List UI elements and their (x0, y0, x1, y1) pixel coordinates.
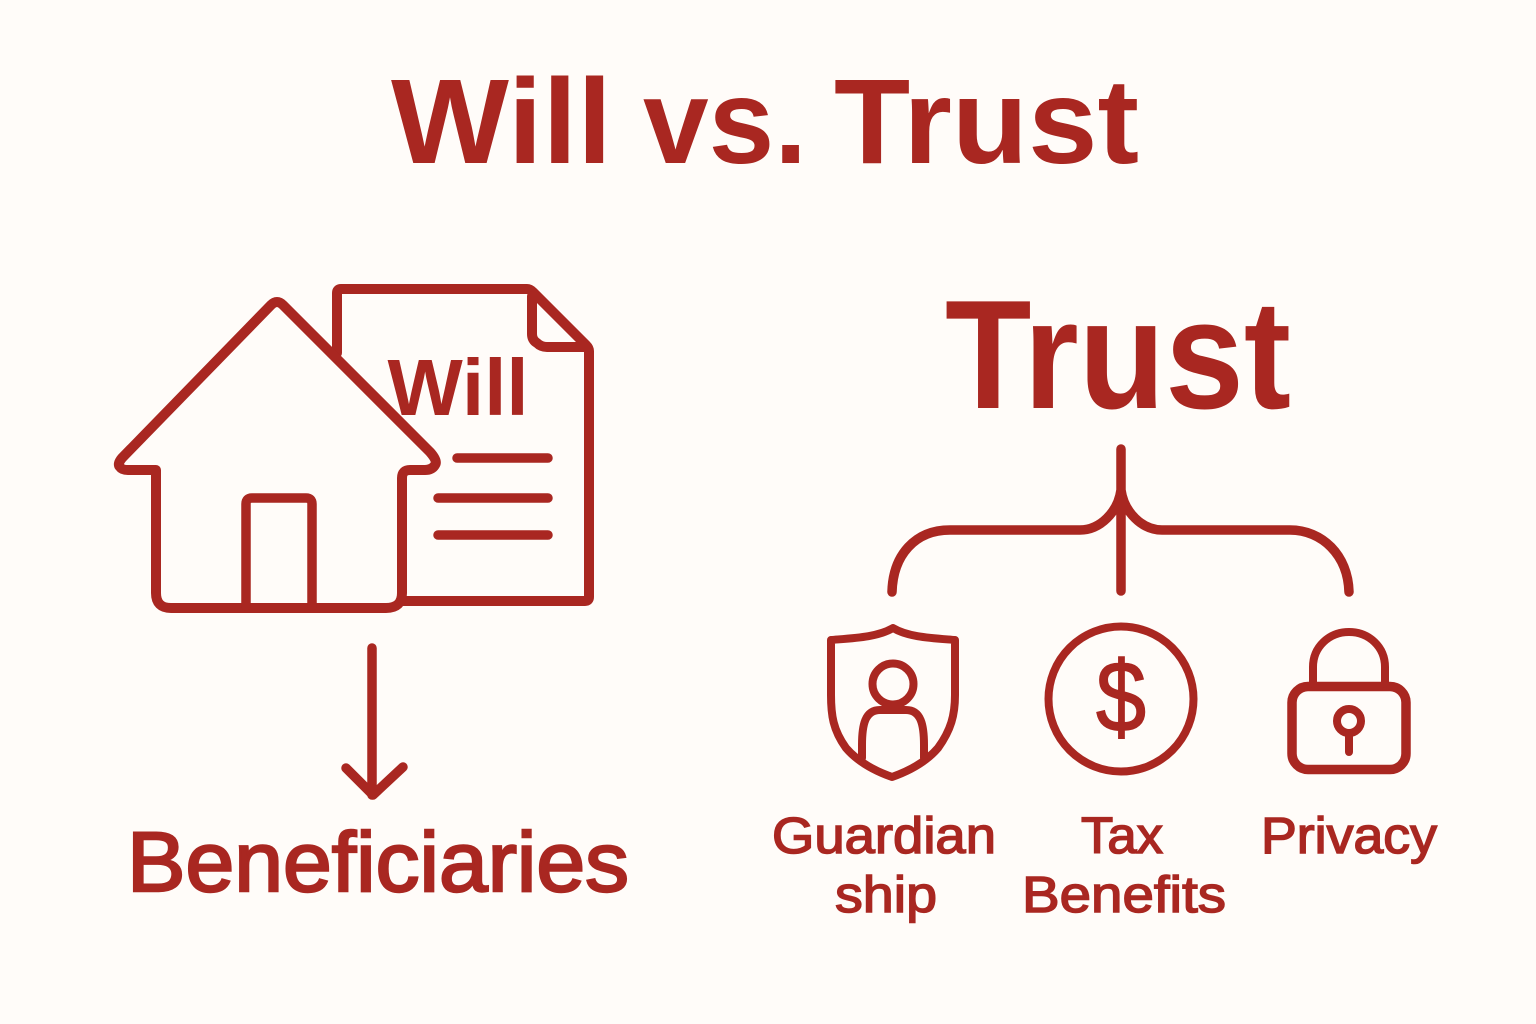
icon: house (119, 302, 436, 608)
dollar sign: $ (1096, 641, 1146, 753)
label: tax benefits: Tax (1081, 807, 1163, 864)
title: vs. (643, 53, 807, 189)
heading: trust: Trust (945, 268, 1291, 441)
title: Trust (834, 53, 1139, 189)
title: Will (391, 53, 612, 189)
panel: will (119, 289, 629, 909)
label: tax benefits: Benefits (1022, 866, 1226, 923)
icon: will document (337, 289, 589, 601)
panel: trust (772, 268, 1438, 923)
icon: privacy padlock (1292, 632, 1406, 770)
label: guardianship: ship (835, 866, 937, 923)
document label: Will (388, 343, 528, 432)
arrow: down to beneficiaries (346, 648, 403, 795)
label: privacy: Privacy (1261, 807, 1438, 864)
icon: tax dollar coin (1048, 626, 1194, 772)
icon: guardianship shield (831, 628, 955, 777)
branching connector (892, 449, 1349, 592)
label: beneficiaries: Beneficiaries (127, 815, 629, 909)
label: guardianship: Guardian (772, 807, 996, 864)
